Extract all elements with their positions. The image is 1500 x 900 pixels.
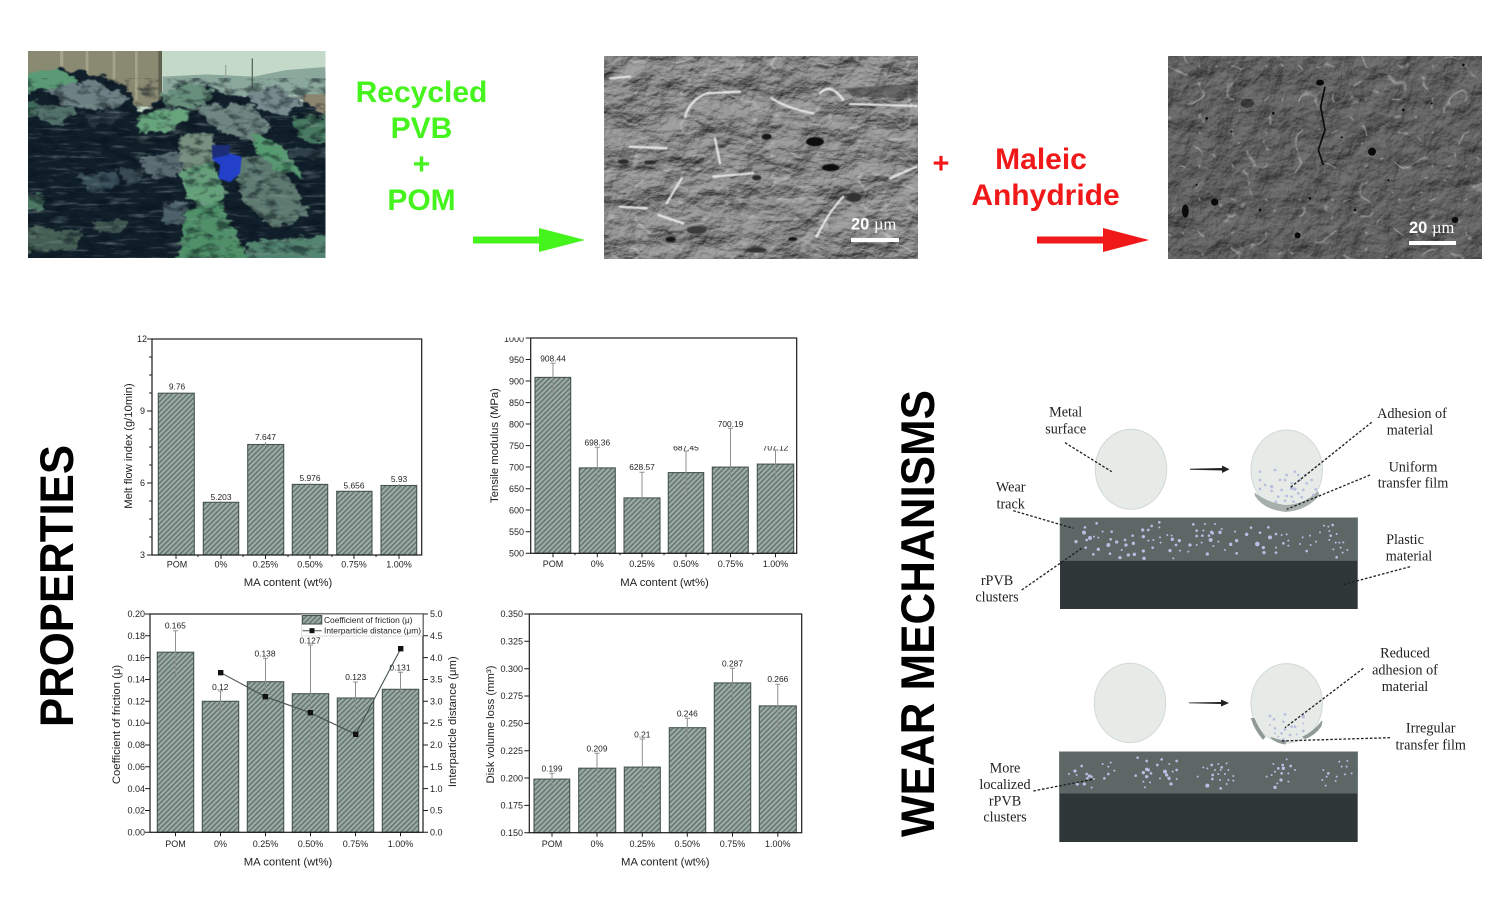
heading: PROPERTIES: PROPERTIES xyxy=(30,445,83,727)
heading: Maleic Anhydride: Maleic xyxy=(995,143,1087,176)
micrograph: POM/rPVB fracture surface xyxy=(604,56,918,259)
bar chart: disk volume loss: 0.150 xyxy=(500,828,523,838)
label: plastic material: Plastic xyxy=(1386,532,1424,548)
bar chart: tensile modulus: 0% xyxy=(591,559,604,569)
icon: motion arrow xyxy=(1189,700,1229,706)
combo chart: coefficient of friction and interparticle distance: 1.0 xyxy=(430,784,443,794)
bar chart: melt flow index: 3 xyxy=(140,550,145,560)
label: wear track: track xyxy=(997,496,1026,512)
bar chart: melt flow index: 5.203 xyxy=(211,492,232,502)
bar chart: disk volume loss: 0.325 xyxy=(500,636,523,646)
combo chart: coefficient of friction and interparticle distance: 0.131 xyxy=(390,663,411,673)
bar chart: melt flow index: 1.00% xyxy=(386,560,412,570)
bar chart: melt flow index: 0% xyxy=(214,560,228,570)
combo chart: coefficient of friction and interparticle distance xyxy=(111,609,459,868)
label: rPVB clusters: rPVB xyxy=(981,573,1013,589)
bar chart: tensile modulus: 600 xyxy=(509,506,524,516)
icon: motion arrow xyxy=(1190,466,1230,473)
bar chart: disk volume loss: 0.50% xyxy=(675,839,700,849)
combo chart: coefficient of friction and interparticle distance: 0.123 xyxy=(345,672,367,682)
bar chart: tensile modulus: POM xyxy=(543,559,563,569)
combo chart: coefficient of friction and interparticle distance: 0.12 xyxy=(127,696,145,706)
combo chart: coefficient of friction and interparticle distance: 4.0 xyxy=(430,653,443,663)
heading: Recycled PVB + POM: + xyxy=(413,148,430,181)
combo chart: coefficient of friction and interparticle distance: 0.75% xyxy=(343,839,368,849)
combo chart: coefficient of friction and interparticle distance: 3.0 xyxy=(430,696,443,706)
bar chart: melt flow index: 7.647 xyxy=(255,432,276,442)
bar chart: melt flow index xyxy=(123,334,422,589)
bar chart: melt flow index: 0.50% xyxy=(297,560,323,570)
bar chart: melt flow index: 9.76 xyxy=(169,382,185,392)
micrograph: with maleic anhydride xyxy=(1168,56,1482,259)
label: uniform transfer film: Uniform xyxy=(1389,460,1437,476)
scale bar: 20 µm xyxy=(1409,218,1456,245)
icon: metal ball xyxy=(1094,663,1166,743)
bar chart: tensile modulus: 700 xyxy=(509,462,524,472)
bar chart: tensile modulus: MA content (wt%) xyxy=(620,577,709,589)
label: reduced adhesion of material: Reduced xyxy=(1380,646,1430,662)
combo chart: coefficient of friction and interparticle distance: 1.5 xyxy=(430,762,443,772)
bar chart: disk volume loss xyxy=(485,609,802,868)
arrow: red xyxy=(1037,228,1149,252)
label: adhesion of material: Adhesion of xyxy=(1377,406,1447,422)
bar chart: disk volume loss: 0.21 xyxy=(634,729,651,739)
bar chart: tensile modulus: 0.75% xyxy=(718,559,743,569)
combo chart: coefficient of friction and interparticle distance: 0.5 xyxy=(430,806,443,816)
label: irregular transfer film: Irregular xyxy=(1406,721,1456,737)
legend: Interparticle distance (μm) xyxy=(324,625,421,635)
combo chart: coefficient of friction and interparticle distance: 0.10 xyxy=(127,718,145,728)
bar chart: disk volume loss: 0.175 xyxy=(500,800,523,810)
legend xyxy=(302,614,422,636)
bar chart: disk volume loss: 0.350 xyxy=(500,609,523,619)
label: more localized rPVB clusters: More xyxy=(990,761,1020,777)
combo chart: coefficient of friction and interparticle distance: 2.0 xyxy=(430,740,443,750)
heading: Maleic Anhydride xyxy=(971,143,1120,212)
label: irregular transfer film: transfer film xyxy=(1395,737,1466,753)
bar chart: tensile modulus: 687.45 xyxy=(673,442,699,452)
label: metal surface: surface xyxy=(1045,422,1086,438)
icon: metal ball with reduced adhesion xyxy=(1251,664,1322,744)
panel: wear mechanism with maleic anhydride xyxy=(979,646,1466,842)
plastic block with wear track xyxy=(1060,518,1358,609)
bar chart: tensile modulus: 650 xyxy=(509,484,524,494)
bar chart: disk volume loss: 0.246 xyxy=(677,709,698,719)
combo chart: coefficient of friction and interparticle distance: 0.04 xyxy=(127,784,145,794)
bar chart: tensile modulus: 900 xyxy=(509,376,524,386)
scale bar: 20 µm xyxy=(851,214,899,242)
bar chart: melt flow index: 0.25% xyxy=(253,560,278,570)
bar chart: disk volume loss: 0.75% xyxy=(720,839,745,849)
bar chart: melt flow index: Melt flow index (g/10min) xyxy=(123,383,135,509)
bar chart: tensile modulus: 0.25% xyxy=(629,559,655,569)
bar chart: melt flow index: 9 xyxy=(140,406,145,416)
bar chart: tensile modulus: 908.44 xyxy=(540,354,566,364)
bar chart: disk volume loss: POM xyxy=(542,839,562,849)
heading: Maleic Anhydride: Anhydride xyxy=(971,179,1120,212)
combo chart: coefficient of friction and interparticle distance: 0% xyxy=(214,839,227,849)
bar chart: disk volume loss: 0.300 xyxy=(500,664,523,674)
bar chart: melt flow index: 0.75% xyxy=(341,560,367,570)
bar chart: tensile modulus: 628.57 xyxy=(629,462,655,472)
bar chart: disk volume loss: 0.209 xyxy=(587,744,608,754)
heading: Recycled PVB + POM: PVB xyxy=(391,112,452,145)
bar chart: tensile modulus: 800 xyxy=(509,420,524,430)
label: adhesion of material: material xyxy=(1387,423,1433,439)
label: wear track: Wear xyxy=(996,480,1026,496)
bar chart: disk volume loss: 0.250 xyxy=(500,718,523,728)
bar chart: tensile modulus: 0.50% xyxy=(673,559,699,569)
bar chart: tensile modulus: 700.19 xyxy=(718,419,744,429)
scale bar: 20 µm: 20 µm xyxy=(851,214,896,234)
combo chart: coefficient of friction and interparticle distance: 3.5 xyxy=(430,674,443,684)
bar chart: tensile modulus: 500 xyxy=(509,548,524,558)
plus sign: + xyxy=(933,148,949,180)
bar chart: disk volume loss: 0.287 xyxy=(722,659,743,669)
label: more localized rPVB clusters: clusters xyxy=(983,810,1027,826)
bar chart: tensile modulus: Tensile modulus (MPa) xyxy=(489,388,501,503)
combo chart: coefficient of friction and interparticle distance: 0.14 xyxy=(127,674,145,684)
bar chart: tensile modulus: 1000 xyxy=(504,334,524,344)
label: more localized rPVB clusters: localized xyxy=(979,777,1031,793)
combo chart: coefficient of friction and interparticle distance: 4.5 xyxy=(430,631,443,641)
heading: Recycled PVB + POM xyxy=(356,76,487,217)
bar chart: melt flow index: POM xyxy=(167,560,187,570)
bar chart: disk volume loss: 0.266 xyxy=(767,674,789,684)
plastic block with localized clusters xyxy=(1059,752,1358,842)
combo chart: coefficient of friction and interparticle distance: 0.127 xyxy=(300,635,321,645)
photo: recycled PVB pile xyxy=(28,51,326,258)
combo chart: coefficient of friction and interparticle distance: Coefficient of friction (μ) xyxy=(111,665,123,784)
bar chart: disk volume loss: 1.00% xyxy=(765,839,791,849)
bar chart: tensile modulus: 707.12 xyxy=(763,442,789,452)
bar chart: tensile modulus xyxy=(489,330,797,589)
panel: wear mechanism without maleic anhydride xyxy=(975,405,1448,609)
label: metal surface: Metal xyxy=(1049,405,1082,421)
heading: WEAR MECHANISMS: WEAR MECHANISMS xyxy=(891,390,944,837)
bar chart: melt flow index: 12 xyxy=(137,334,147,344)
bar chart: melt flow index: 5.93 xyxy=(391,474,407,484)
label: reduced adhesion of material: material xyxy=(1382,679,1428,695)
label: uniform transfer film: transfer film xyxy=(1378,476,1448,492)
combo chart: coefficient of friction and interparticle distance: 0.25% xyxy=(253,839,278,849)
bar chart: disk volume loss: 0% xyxy=(590,839,604,849)
combo chart: coefficient of friction and interparticle distance: 0.16 xyxy=(127,653,145,663)
bar chart: tensile modulus: 550 xyxy=(509,527,524,537)
combo chart: coefficient of friction and interparticle distance: 0.50% xyxy=(298,839,323,849)
bar chart: tensile modulus: 850 xyxy=(509,398,524,408)
arrow: green xyxy=(473,228,585,252)
bar chart: disk volume loss: MA content (wt%) xyxy=(621,856,710,868)
line series: interparticle distance xyxy=(218,646,403,737)
bar chart: disk volume loss: 0.199 xyxy=(542,764,563,774)
bar chart: tensile modulus: 698.36 xyxy=(584,438,610,448)
combo chart: coefficient of friction and interparticle distance: 0.00 xyxy=(127,828,145,838)
combo chart: coefficient of friction and interparticle distance: 0.02 xyxy=(127,806,145,816)
bar chart: tensile modulus: 1.00% xyxy=(763,559,788,569)
combo chart: coefficient of friction and interparticle distance: 0.12 xyxy=(212,682,229,692)
label: plastic material: material xyxy=(1386,548,1432,564)
label: reduced adhesion of material: adhesion of xyxy=(1372,662,1438,678)
bar chart: melt flow index: MA content (wt%) xyxy=(244,577,332,589)
bar chart: melt flow index: 5.976 xyxy=(300,473,321,483)
bar chart: disk volume loss: 0.225 xyxy=(500,746,523,756)
combo chart: coefficient of friction and interparticle distance: 0.0 xyxy=(430,828,443,838)
bar chart: tensile modulus: 950 xyxy=(509,355,524,365)
combo chart: coefficient of friction and interparticle distance: 0.18 xyxy=(127,631,145,641)
bar chart: disk volume loss: 0.200 xyxy=(500,774,523,784)
heading: Recycled PVB + POM: POM xyxy=(387,184,456,217)
bar chart: tensile modulus: 750 xyxy=(509,441,524,451)
combo chart: coefficient of friction and interparticle distance: Interparticle distance (μm) xyxy=(447,656,459,787)
bar chart: disk volume loss: 0.275 xyxy=(500,691,523,701)
combo chart: coefficient of friction and interparticle distance: 0.138 xyxy=(255,649,276,659)
bar chart: melt flow index: 5.656 xyxy=(344,480,365,490)
combo chart: coefficient of friction and interparticle distance: 5.0 xyxy=(430,609,443,619)
combo chart: coefficient of friction and interparticle distance: POM xyxy=(165,839,186,849)
label: more localized rPVB clusters: rPVB xyxy=(989,794,1021,810)
combo chart: coefficient of friction and interparticle distance: 2.5 xyxy=(430,718,443,728)
label: rPVB clusters: clusters xyxy=(975,590,1019,606)
bar chart: disk volume loss: 0.25% xyxy=(630,839,655,849)
heading: Recycled PVB + POM: Recycled xyxy=(356,76,487,109)
icon: metal ball xyxy=(1095,429,1167,509)
combo chart: coefficient of friction and interparticle distance: 0.08 xyxy=(127,740,145,750)
bar chart: melt flow index: 6 xyxy=(140,478,145,488)
combo chart: coefficient of friction and interparticle distance: 1.00% xyxy=(388,839,413,849)
combo chart: coefficient of friction and interparticle distance: MA content (wt%) xyxy=(244,856,332,868)
combo chart: coefficient of friction and interparticle distance: 0.165 xyxy=(165,620,186,630)
combo chart: coefficient of friction and interparticle distance: 0.06 xyxy=(127,762,145,772)
legend: Coefficient of friction (μ) xyxy=(324,615,413,625)
combo chart: coefficient of friction and interparticle distance: 0.20 xyxy=(127,609,145,619)
bar chart: disk volume loss: Disk volume loss (mm³) xyxy=(485,665,497,784)
scale bar: 20 µm: 20 µm xyxy=(1409,218,1454,237)
icon: metal ball with adhered material xyxy=(1251,430,1322,512)
